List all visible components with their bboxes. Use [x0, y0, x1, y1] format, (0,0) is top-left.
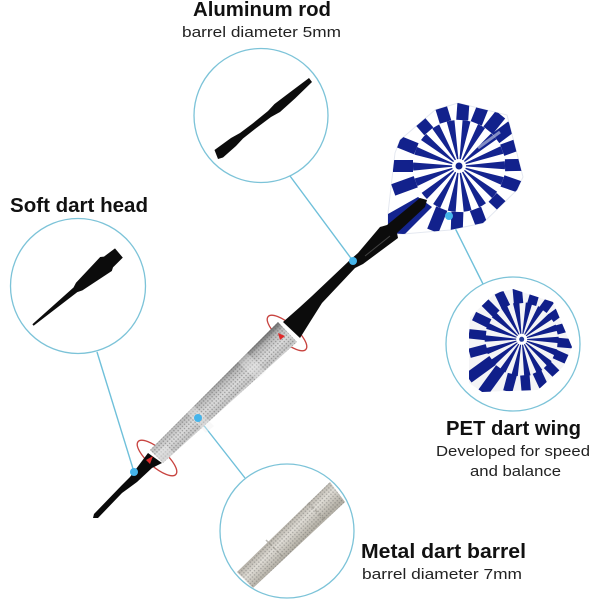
heading: Metal dart barrel: Metal dart barrel — [361, 541, 526, 563]
leader line: soft dart head — [97, 352, 134, 472]
dart tip — [93, 453, 162, 518]
heading: Soft dart head: Soft dart head — [10, 195, 148, 217]
heading: PET dart wing: PET dart wing — [446, 418, 581, 440]
dart flight — [388, 100, 525, 234]
text: rod diameter: barrel diameter 5mm — [182, 24, 341, 41]
red markers — [146, 333, 285, 464]
leader line: metal dart barrel — [198, 418, 245, 478]
icon: wing — [469, 289, 572, 392]
circle callout: aluminum rod — [194, 48, 328, 182]
circle callout: PET dart wing — [446, 277, 580, 411]
icon: barrel close-up — [237, 482, 345, 588]
red ellipse: front barrel — [132, 435, 182, 481]
text: wing description — [436, 443, 590, 480]
circle callout: soft dart head — [10, 218, 146, 354]
leader line: PET dart wing — [449, 216, 483, 284]
icon: rod — [214, 78, 312, 159]
circle callout: metal dart barrel — [220, 464, 354, 598]
red ellipse: rear barrel — [262, 310, 312, 356]
text: wing description: Developed for speed — [436, 443, 590, 460]
dart shaft — [283, 198, 427, 338]
leader line: aluminum rod — [290, 176, 353, 261]
icon: dart head — [32, 248, 123, 326]
text: barrel diameter: barrel diameter 7mm — [362, 566, 522, 583]
text: wing description: and balance — [470, 463, 561, 480]
dart barrel — [150, 322, 297, 463]
anchor dots — [130, 212, 453, 476]
